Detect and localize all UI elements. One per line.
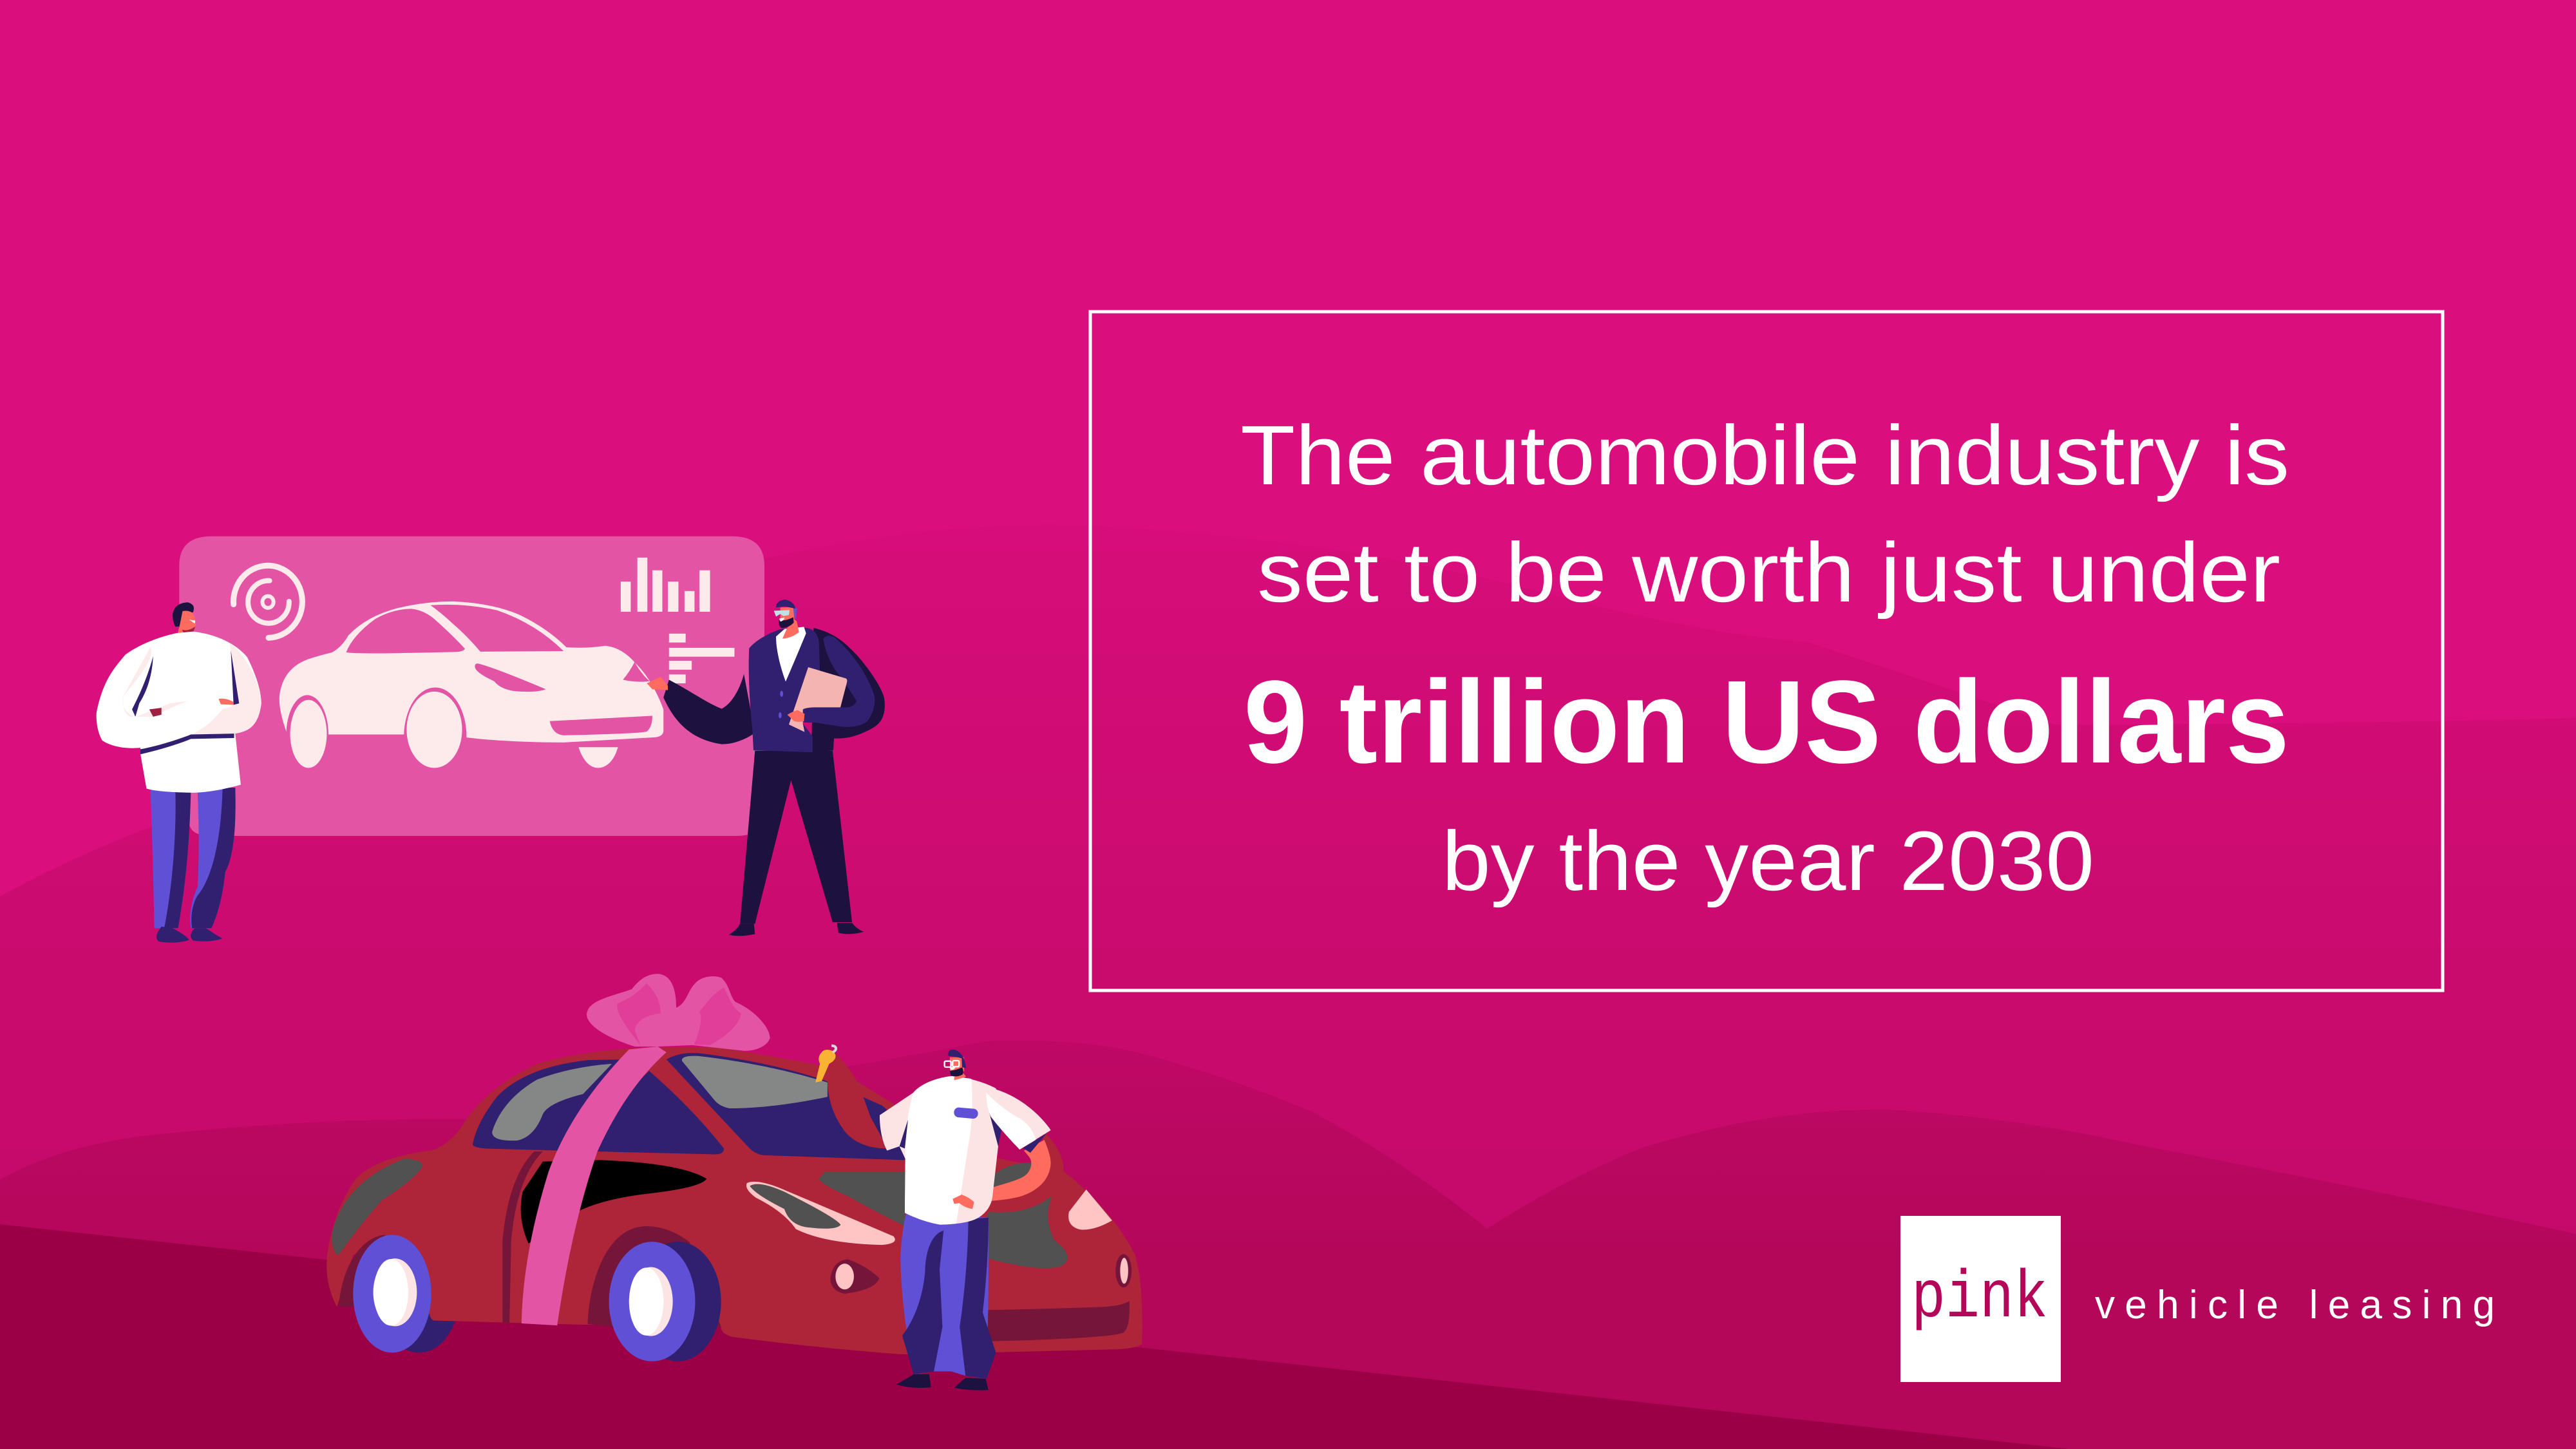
- clipboard: [789, 667, 847, 732]
- headline text: The automobile industry is: [1240, 408, 2289, 502]
- neck and head: [782, 618, 799, 639]
- icon: radar rings: [234, 565, 302, 638]
- bar chart icon: [621, 558, 710, 612]
- raised arm: [828, 1051, 888, 1149]
- car with ribbon: [327, 974, 1142, 1361]
- headline text: set to be worth just under: [1257, 525, 2280, 620]
- red arm shadow: [971, 1133, 1064, 1213]
- hood gray reflection: [819, 1172, 905, 1226]
- ribbon: [522, 1046, 667, 1325]
- coat: [97, 632, 261, 793]
- headline text: [1240, 408, 2289, 908]
- shirt: [880, 1076, 998, 1225]
- text box: [1090, 312, 2443, 990]
- hand: [952, 1195, 974, 1209]
- headline text: 9 trillion US dollars: [1244, 656, 2289, 788]
- logo: pink: [1911, 1261, 2048, 1337]
- side window: [473, 1059, 629, 1151]
- character: man in white coat: [97, 602, 261, 943]
- character: man in suit: [647, 600, 885, 936]
- trousers: [151, 788, 236, 928]
- jacket: [811, 628, 885, 752]
- body: [327, 1047, 1142, 1354]
- rear wheel: [339, 1235, 431, 1352]
- trousers: [740, 751, 852, 923]
- trousers: [900, 1213, 989, 1379]
- shoes: [156, 927, 222, 943]
- shoes: [896, 1374, 989, 1390]
- character: man with key: [880, 1050, 1064, 1390]
- badge: [954, 1107, 978, 1119]
- logo: [1900, 1216, 2495, 1382]
- shoes: [729, 923, 864, 936]
- key: [815, 1046, 836, 1083]
- rear gray window: [332, 1159, 422, 1255]
- sleeve: [987, 1089, 1051, 1150]
- grille: [922, 1301, 1130, 1343]
- forearm: [971, 1140, 1051, 1202]
- front wheel: [588, 1226, 721, 1361]
- windshield: [667, 1053, 905, 1160]
- lights: [746, 1182, 895, 1245]
- head: [173, 602, 194, 627]
- hands: [218, 699, 234, 705]
- door line and vent: [502, 1151, 543, 1323]
- head: [954, 1071, 966, 1080]
- logo: vehicle leasing: [2095, 1283, 2495, 1327]
- rear tyre: [379, 1238, 459, 1352]
- car silhouette: [279, 601, 663, 768]
- shirt: [776, 627, 806, 681]
- headline text: by the year 2030: [1442, 813, 2094, 908]
- bow: [587, 974, 770, 1051]
- hand: [788, 710, 804, 722]
- horizontal bars icon: [669, 634, 734, 683]
- pointing arm: [663, 674, 755, 744]
- panel: dashboard screen with car silhouette: [179, 536, 764, 836]
